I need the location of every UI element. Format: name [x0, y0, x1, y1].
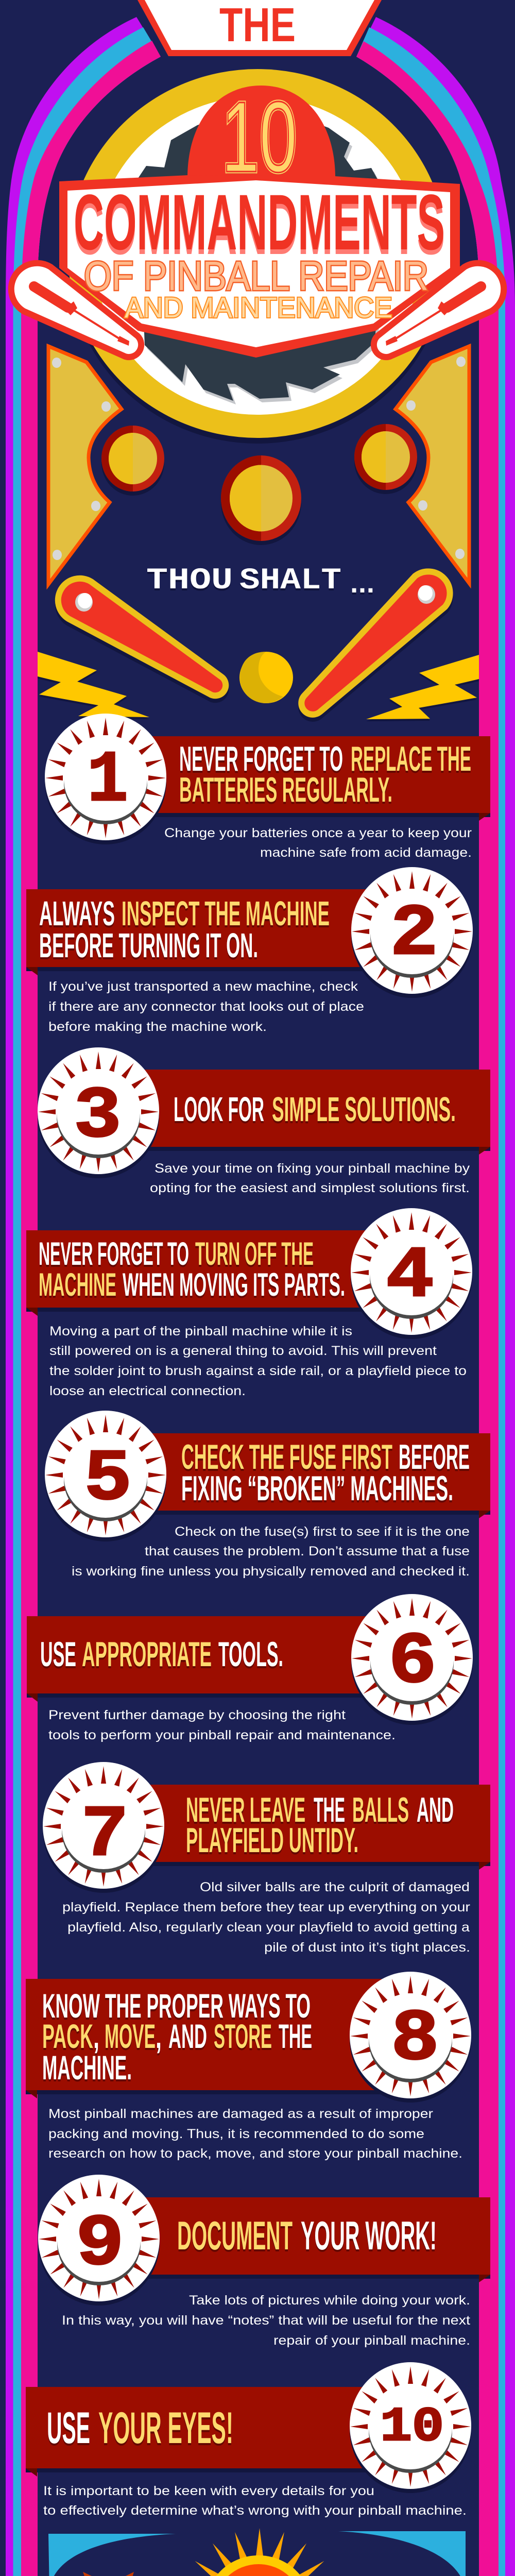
body 2	[48, 979, 364, 1034]
heading 3: LOOK FOR	[174, 1090, 264, 1129]
heading 10	[47, 2403, 233, 2453]
badge 4: 4	[386, 1236, 434, 1318]
body 5	[72, 1524, 470, 1579]
body 2: before making the machine work.	[48, 1020, 267, 1034]
badge 7	[43, 1762, 164, 1893]
starburst	[180, 2528, 339, 2576]
commandment 8	[26, 1972, 471, 2161]
body 9: In this way, you will have “notes” that will be useful for the next	[62, 2313, 470, 2328]
body 5: Check on the fuse(s) first to see if it is the one	[175, 1524, 470, 1539]
body 3	[150, 1161, 470, 1195]
lightning bolt: right	[366, 655, 479, 719]
left side panel	[48, 346, 122, 584]
bumper: centre	[221, 455, 301, 541]
ribbon 1	[106, 736, 490, 821]
badge 10: 10	[380, 2400, 444, 2455]
heading 7: BALLS	[352, 1790, 409, 1829]
ribbon 9	[99, 2197, 490, 2282]
badge 5: 5	[84, 1439, 132, 1521]
heading 8: ,	[93, 2017, 99, 2055]
title shield	[59, 175, 460, 358]
heading 3	[174, 1090, 456, 1129]
commandment 3	[38, 1047, 490, 1195]
body 4: still powered on is a general thing to avoid. This will prevent	[49, 1344, 437, 1358]
blue corner: right	[338, 2531, 466, 2576]
badge 2	[351, 867, 473, 998]
gear	[138, 103, 386, 404]
body 2: if there are any connector that looks out of place	[48, 999, 364, 1014]
heading 7: PLAYFIELD UNTIDY.	[186, 1821, 358, 1860]
number 10 in title	[221, 81, 297, 195]
red flipper: right	[301, 571, 450, 715]
body 9: Take lots of pictures while doing your work.	[189, 2293, 470, 2308]
heading 7: NEVER LEAVE	[186, 1790, 305, 1829]
badge 3: 3	[74, 1076, 122, 1158]
yellow ball	[239, 652, 293, 703]
bumper: left	[101, 426, 164, 492]
body 6	[48, 1708, 396, 1742]
commandment 7: AND	[417, 1790, 454, 1829]
heading 8: MACHINE.	[42, 2048, 132, 2087]
100 points bonus target	[180, 2528, 339, 2576]
ribbon 7	[104, 1785, 490, 1870]
body 3: Save your time on fixing your pinball machine by	[154, 1161, 470, 1176]
body 9: repair of your pinball machine.	[273, 2333, 470, 2348]
commandment 10	[26, 2362, 471, 2518]
body 3: opting for the easiest and simplest solutions first.	[150, 1181, 470, 1195]
heading 4: MACHINE	[39, 1267, 116, 1303]
badge 6: 6	[388, 1622, 437, 1704]
badge 1	[45, 714, 166, 844]
subtitle: and maintenance: AND MAINTENANCE	[125, 291, 392, 324]
badge 1: 1	[87, 740, 128, 822]
badge 9: 9	[76, 2204, 124, 2286]
heading 8: ,	[156, 2017, 162, 2055]
heading 9: DOCUMENT	[177, 2213, 293, 2258]
body 1	[164, 826, 472, 860]
right side panel	[396, 346, 469, 583]
rainbow side stripes: left	[6, 17, 161, 2576]
commandment 6	[27, 1594, 473, 1742]
flipper with screwdriver: right	[374, 263, 504, 357]
body 2: If you’ve just transported a new machine, check	[48, 979, 358, 994]
ribbon 10	[26, 2387, 410, 2477]
body 7	[62, 1880, 470, 1955]
heading 6	[40, 1635, 283, 1674]
badge 8	[350, 1972, 471, 2103]
body 7: playfield. Replace them before they tear up everything on your	[62, 1900, 470, 1914]
badge 6	[351, 1594, 473, 1725]
heading 4	[39, 1236, 345, 1303]
bumper: right	[354, 424, 417, 490]
gold ring	[68, 69, 447, 444]
body 8	[48, 2107, 462, 2161]
chevron arrow: left	[83, 2572, 134, 2576]
commandment 9	[38, 2175, 490, 2348]
body 4	[49, 1324, 467, 1398]
badge 7: 7	[81, 1795, 129, 1877]
heading 2	[39, 894, 330, 965]
heading 8: STORE	[214, 2017, 272, 2055]
ribbon 2	[26, 889, 412, 975]
red dome	[187, 86, 335, 178]
heading 10: USE	[47, 2403, 90, 2453]
heading 5	[181, 1437, 470, 1508]
number 10 in title: 10	[221, 83, 297, 195]
blue corner: left	[48, 2534, 176, 2576]
rainbow side stripes: right	[356, 17, 515, 2576]
commandment 2	[26, 867, 473, 1034]
heading 8	[42, 1987, 312, 2087]
heading 8: MOVE	[105, 2017, 156, 2055]
heading 2: INSPECT THE MACHINE	[122, 894, 330, 933]
title banner: THE	[138, 0, 382, 56]
commandment 1	[45, 714, 490, 860]
heading 1	[179, 739, 471, 809]
ribbon 5	[106, 1433, 490, 1518]
number 10 in title: 10	[221, 81, 297, 193]
body 8: research on how to pack, move, and store your pinball machine.	[48, 2146, 462, 2161]
heading 2: ALWAYS	[39, 894, 115, 933]
heading 4: NEVER FORGET TO	[39, 1236, 189, 1272]
body 1: Change your batteries once a year to keep your	[164, 826, 472, 840]
commandment 4	[26, 1208, 472, 1398]
body 6: Prevent further damage by choosing the right	[48, 1708, 346, 1722]
badge 8: 8	[391, 1999, 439, 2081]
badge 10	[350, 2362, 471, 2493]
heading 7	[186, 1790, 454, 1860]
red flipper: left	[58, 579, 226, 696]
body 4: the solder joint to brush against a side rail, or a playfield piece to	[49, 1364, 467, 1378]
body 5: is working fine unless you physically removed and checked it.	[72, 1564, 470, 1579]
heading 6: USE	[40, 1635, 76, 1674]
badge 3	[38, 1047, 159, 1178]
body 7: playfield. Also, regularly clean your playfield to avoid getting a	[67, 1920, 470, 1935]
heading 8: PACK	[42, 2017, 93, 2055]
flipper with screwdriver: left	[11, 263, 141, 357]
body 7: pile of dust into it’s tight places.	[264, 1940, 470, 1955]
commandment 7	[43, 1762, 490, 1955]
heading 4: TURN OFF THE	[195, 1236, 314, 1272]
body 10: It is important to be keen with every details for you	[43, 2484, 374, 2498]
heading: thou shalt: THOU	[146, 564, 233, 598]
ribbon 3	[98, 1070, 490, 1155]
body 6: tools to perform your pinball repair and maintenance.	[48, 1728, 396, 1742]
body 7: Old silver balls are the culprit of damaged	[200, 1880, 470, 1894]
commandment 8: THE	[279, 2017, 312, 2055]
heading 6: TOOLS.	[218, 1635, 283, 1674]
heading 6: APPROPRIATE	[82, 1635, 212, 1674]
subtitle: of pinball repair: OF PINBALL REPAIR	[84, 253, 428, 299]
body 5: that causes the problem. Don’t assume that a fuse	[145, 1544, 470, 1558]
heading 1: NEVER FORGET TO	[179, 739, 343, 778]
body 4: Moving a part of the pinball machine while it is	[49, 1324, 352, 1338]
heading: thou shalt: SHALT	[239, 564, 341, 598]
ribbon 6	[27, 1616, 412, 1702]
heading 7: THE	[314, 1790, 345, 1829]
ribbon 8	[26, 1979, 410, 2098]
heading: thou shalt: ...	[350, 567, 374, 599]
body 10	[43, 2484, 467, 2518]
badge 2: 2	[390, 894, 438, 976]
number 10 in title: 10	[221, 81, 297, 193]
body 1: machine safe from acid damage.	[260, 845, 472, 860]
lightning bolt: left	[38, 652, 149, 717]
badge 4	[351, 1208, 472, 1339]
heading 8: AND	[168, 2017, 207, 2055]
badge 9	[38, 2175, 160, 2306]
body 10: to effectively determine what’s wrong with your pinball machine.	[43, 2503, 467, 2518]
body 4: loose an electrical connection.	[49, 1384, 246, 1398]
body 8: Most pinball machines are damaged as a result of improper	[48, 2107, 433, 2121]
commandment 5	[45, 1411, 490, 1579]
heading: thou shalt	[146, 564, 374, 599]
commandment 10: YOUR EYES!	[98, 2403, 233, 2453]
ribbon 4	[26, 1230, 411, 1316]
body 9	[62, 2293, 470, 2348]
heading 2: BEFORE TURNING IT ON.	[39, 926, 258, 965]
body 8: packing and moving. Thus, it is recommended to do some	[48, 2127, 424, 2141]
badge 5	[45, 1411, 166, 1541]
